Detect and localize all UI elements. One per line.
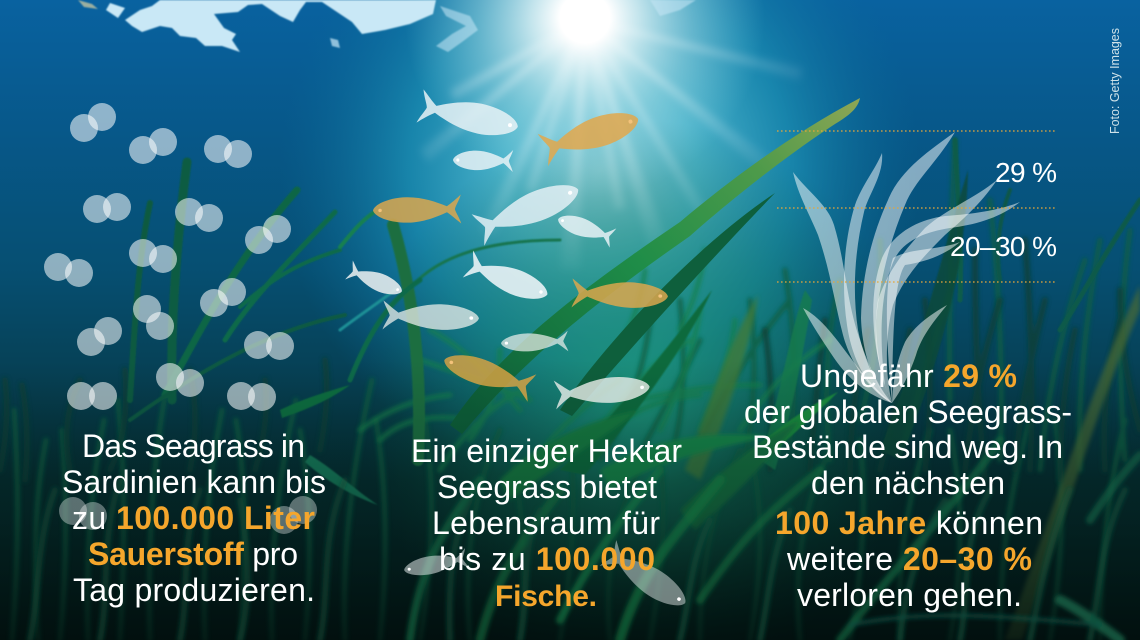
dim bubble pair behind text right xyxy=(270,496,317,534)
white fish 5 xyxy=(472,174,585,246)
bubble pair 5 xyxy=(175,198,223,232)
text block: global loss: verloren gehen. xyxy=(797,577,1022,613)
text block: global loss: Ungefähr 29 % xyxy=(800,358,1017,394)
white fish 3 xyxy=(453,149,513,172)
text block: global loss: Bestände sind weg. In xyxy=(752,429,1063,465)
text block: oxygen: Sauerstoff pro xyxy=(88,536,298,572)
text block: fish habitat: Fische. xyxy=(495,580,597,613)
text block: fish habitat: Seegrass bietet xyxy=(437,469,657,505)
text block: oxygen: zu 100.000 Liter xyxy=(72,500,315,536)
white fish 9 xyxy=(345,261,406,301)
white fish 6 xyxy=(555,209,616,248)
text block: fish habitat: Lebensraum für xyxy=(432,505,660,541)
bubble pair 2 xyxy=(129,128,177,164)
text block: fish habitat: bis zu 100.000 xyxy=(439,541,655,577)
label 29 %: 29 % xyxy=(995,157,1057,188)
bubble pair 9 xyxy=(200,278,246,317)
gold fish 12 xyxy=(440,346,536,402)
text block: fish habitat xyxy=(411,433,682,613)
water surface reflections xyxy=(78,0,696,52)
school of fish xyxy=(345,89,693,616)
olive blade xyxy=(685,295,758,480)
seagrass icon xyxy=(793,132,1020,403)
dim fish 14 xyxy=(402,548,469,580)
text block: global loss: weitere 20–30 % xyxy=(786,541,1032,577)
bubble pair 14 xyxy=(67,382,117,410)
label 20–30 %: 20–30 % xyxy=(950,231,1057,262)
scale lines xyxy=(777,131,1057,282)
gold fish 4 xyxy=(373,195,461,225)
dim fish 15 xyxy=(600,540,693,616)
dim bubble pair behind text left xyxy=(59,497,107,530)
photo credit: Foto: Getty Images xyxy=(1108,28,1122,134)
bubble pair 1 xyxy=(70,103,116,142)
bubble pair 6 xyxy=(245,215,291,254)
white fish 13 xyxy=(554,372,651,409)
text block: global loss: 100 Jahre können xyxy=(775,505,1043,541)
gold fish 8 xyxy=(571,279,668,311)
white fish 7 xyxy=(463,251,553,308)
bubble pair 13 xyxy=(156,363,204,397)
text block: global loss xyxy=(744,358,1072,613)
text block: oxygen: Tag produzieren. xyxy=(73,572,315,608)
bubble pair 12 xyxy=(244,331,294,360)
seagrass decline chart xyxy=(777,131,1057,403)
bubble pair 7 xyxy=(44,253,93,287)
bubble pair 4 xyxy=(83,193,131,223)
text block: oxygen: Sardinien kann bis xyxy=(62,464,326,500)
text block: global loss: den nächsten xyxy=(811,465,1005,501)
background seagrass xyxy=(0,140,1140,640)
brown blade xyxy=(1005,285,1140,640)
gold fish 2 xyxy=(538,103,643,166)
bubble pair 15 xyxy=(227,382,276,411)
bubble pair 3 xyxy=(204,135,252,168)
white fish 11 xyxy=(501,331,568,354)
white fish 10 xyxy=(382,301,479,333)
text block: fish habitat: Ein einziger Hektar xyxy=(411,433,682,469)
oxygen bubbles xyxy=(44,103,317,534)
bubble pair 8 xyxy=(129,239,177,273)
white fish 1 xyxy=(416,89,521,143)
text block: oxygen xyxy=(62,428,326,608)
text block: global loss: der globalen Seegrass- xyxy=(744,394,1072,430)
bubble pair 11 xyxy=(77,317,122,356)
bubble pair 10 xyxy=(133,295,174,340)
text block: oxygen: Das Seagrass in xyxy=(82,428,305,464)
